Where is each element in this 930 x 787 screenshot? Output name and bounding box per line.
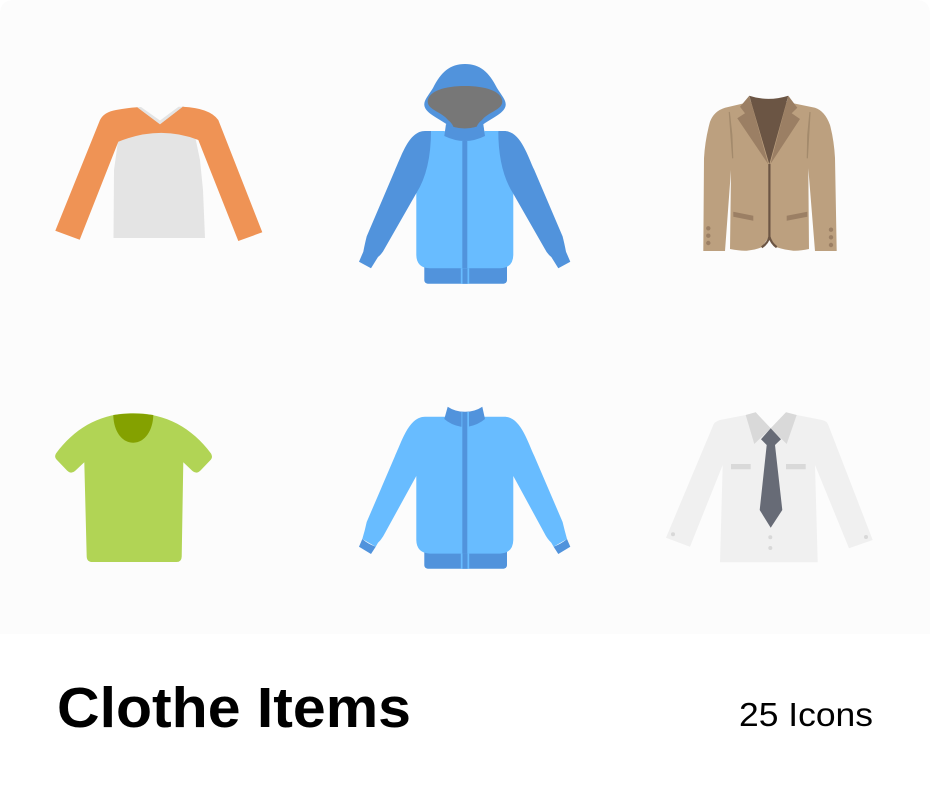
icon: white shirt with tie (666, 412, 873, 562)
right lapel (770, 96, 800, 164)
hood opening (428, 86, 502, 130)
shirt pockets (731, 464, 806, 469)
zipper (462, 412, 469, 427)
buttons (671, 532, 868, 550)
collar (746, 412, 797, 444)
torso (416, 131, 513, 268)
icon: blue hooded jacket (359, 64, 570, 284)
collar (444, 407, 485, 427)
zipper (462, 141, 467, 268)
icon: green t-shirt (55, 413, 212, 562)
icon: tan blazer (703, 96, 837, 251)
icon count: 25 Icons (739, 696, 873, 733)
neckline trim (137, 107, 183, 124)
icon: blue zip jacket (359, 407, 570, 569)
hem band (424, 262, 507, 284)
hood (424, 64, 506, 141)
pockets (733, 212, 807, 221)
inner lining (749, 96, 788, 164)
title: Clothe Items (57, 676, 411, 740)
sleeve darts (729, 112, 810, 158)
left lapel (737, 96, 768, 164)
cuff buttons (706, 226, 833, 247)
neckline (113, 414, 153, 443)
tie (760, 428, 782, 528)
collar (444, 124, 485, 141)
left sleeve (359, 131, 431, 268)
right sleeve (498, 131, 570, 268)
icon: orange raglan sweater (55, 106, 262, 241)
blazer body (703, 102, 837, 251)
hem band (424, 547, 507, 569)
jacket body and sleeves (362, 417, 567, 554)
left cuff (359, 539, 376, 554)
front seam (762, 164, 777, 247)
right cuff (554, 539, 570, 554)
